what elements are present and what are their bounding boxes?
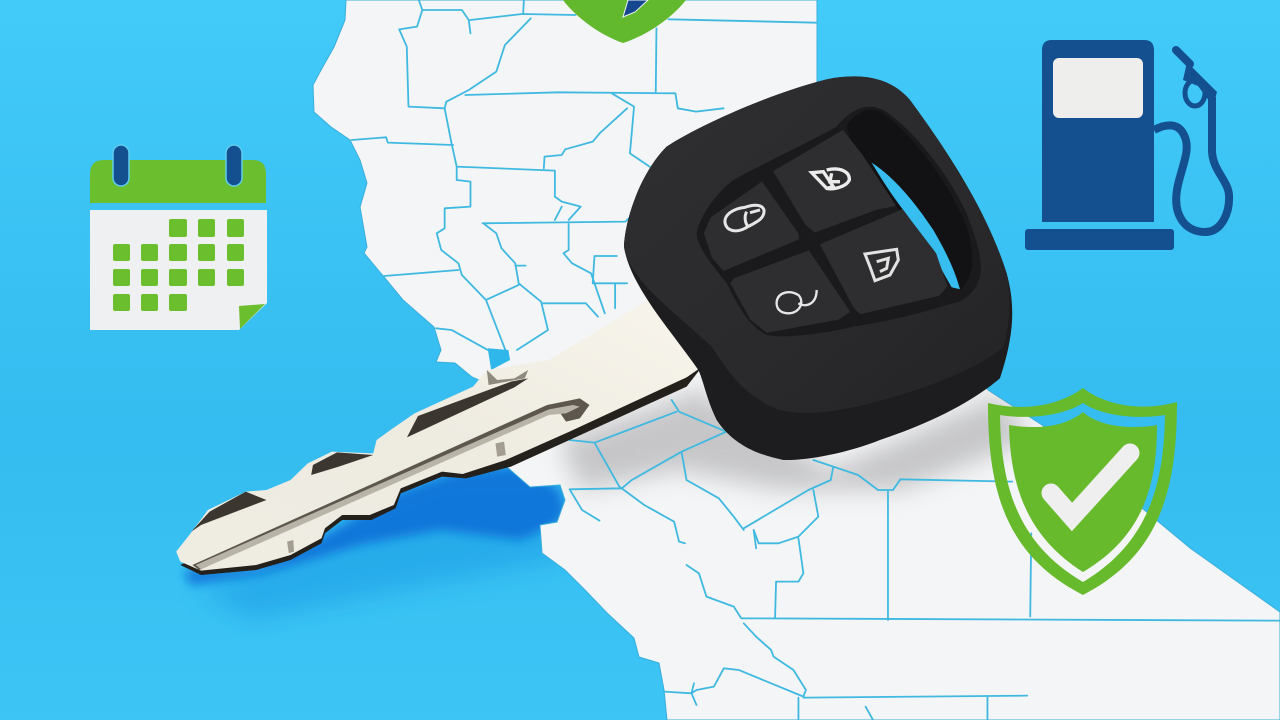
fob icon: trunk	[865, 249, 898, 281]
fob recess	[697, 107, 981, 336]
key fob	[624, 76, 1012, 460]
blade main groove	[192, 398, 589, 570]
key shadow on water	[184, 465, 566, 585]
north county lines	[352, 0, 817, 370]
blade dark underside	[180, 367, 702, 575]
fob icon: unlock	[812, 169, 849, 189]
south county lines	[570, 400, 1280, 720]
blade cut: third	[407, 378, 528, 437]
blade small nicks	[287, 442, 506, 553]
key blade	[176, 293, 702, 575]
fob shadow on map	[560, 390, 1030, 490]
map of counties	[313, 0, 1280, 720]
pump body	[1042, 40, 1154, 222]
shield check mark	[1051, 453, 1130, 517]
blade cut: tip	[191, 492, 266, 532]
fob sliver of background	[872, 163, 960, 289]
fob button: bottom left	[732, 252, 849, 331]
icon: partial shield at top	[563, 0, 686, 43]
fob button: bottom right	[822, 211, 946, 313]
calendar folded corner	[239, 304, 265, 329]
pump base	[1025, 229, 1174, 250]
fob icon: alarm	[777, 290, 817, 313]
calendar rings	[113, 145, 242, 186]
icon: shield with checkmark	[988, 388, 1177, 595]
soft key shadow on water	[200, 490, 560, 620]
fob key ring opening	[847, 110, 972, 290]
fob button: top left	[705, 183, 798, 269]
shield outer ring	[988, 388, 1177, 595]
blade cut: second	[311, 452, 373, 475]
calendar page	[90, 210, 267, 330]
blade face	[176, 293, 702, 571]
calendar date grid	[113, 219, 244, 311]
map land	[313, 0, 1280, 720]
fob lower body	[624, 76, 1012, 460]
pump display	[1053, 58, 1143, 118]
calendar header	[90, 160, 266, 203]
icon: fuel pump	[1025, 40, 1229, 250]
icon: calendar	[90, 145, 267, 330]
top shield body	[563, 0, 686, 43]
shield inner	[1009, 412, 1157, 572]
fob icon: lock links	[725, 205, 764, 231]
top shield blue mark	[623, 0, 648, 17]
blade shoulder notch	[487, 370, 528, 385]
pump nozzle	[1176, 50, 1217, 106]
pump hose	[1154, 97, 1229, 232]
fob top face	[624, 76, 1010, 413]
car key	[176, 76, 1012, 575]
fob button: top right	[775, 132, 894, 231]
